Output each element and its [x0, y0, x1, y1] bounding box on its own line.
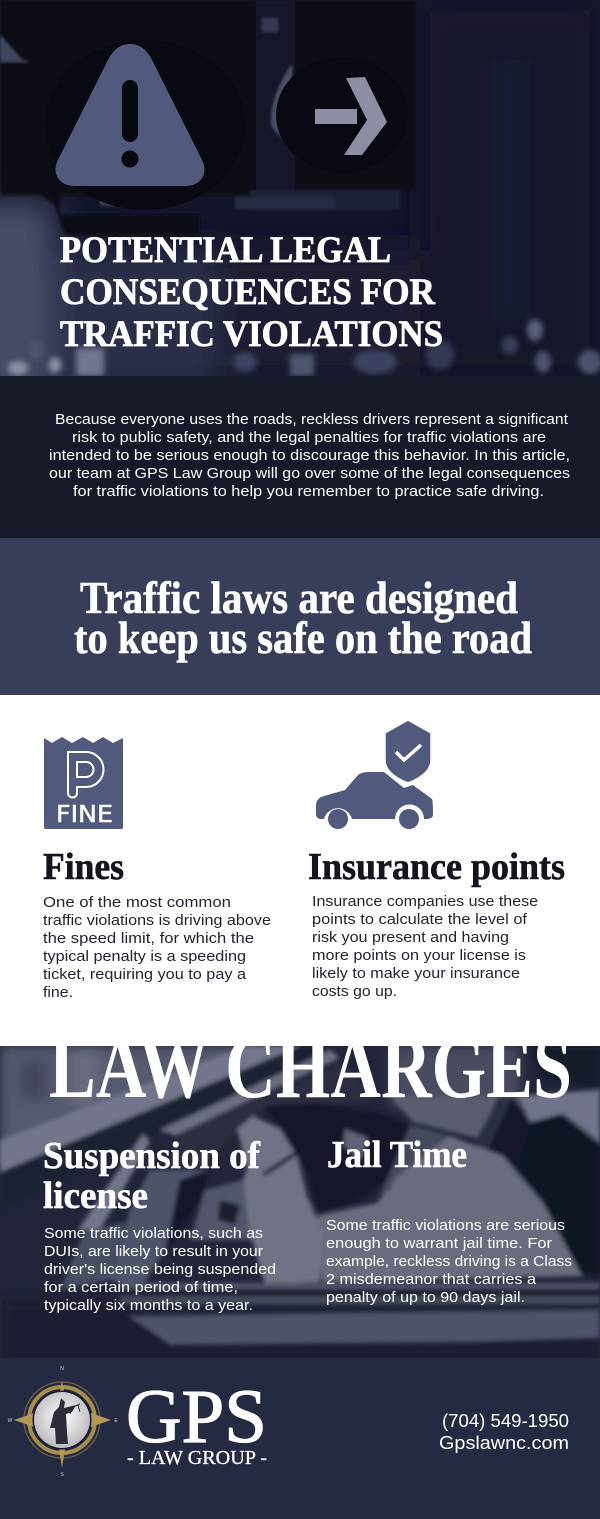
- heading: traffic laws: to keep us safe on the road: [74, 613, 532, 663]
- intro paragraph: our team at GPS Law Group will go over some of the legal consequences: [49, 465, 570, 482]
- text: fines body: the speed limit, for which the: [43, 930, 254, 947]
- text: suspension body: [44, 1225, 276, 1314]
- car roof and window pillars: [0, 1046, 300, 1178]
- icon: warning triangle: [56, 44, 204, 186]
- text: jail time body: Some traffic violations are serious: [326, 1217, 565, 1234]
- heading: fines: Fines: [43, 846, 124, 888]
- text: jail time body: penalty of up to 90 days jail.: [326, 1289, 525, 1306]
- title: CONSEQUENCES FOR: [60, 272, 436, 313]
- traffic signal housing: [0, 0, 415, 235]
- panel: footer: [0, 1358, 600, 1519]
- text: insurance body: more points on your license is: [312, 947, 526, 964]
- logo wordmark: GPS: [126, 1375, 267, 1459]
- icon: compass logo: [8, 1366, 118, 1478]
- panel: fines and insurance points: [0, 695, 600, 1046]
- icon: car with shield: [316, 720, 433, 829]
- text: jail time body: enough to warrant jail time. For: [326, 1235, 552, 1252]
- panel: law charges photo background: [0, 1046, 600, 1370]
- text: suspension body: for a certain period of time,: [44, 1279, 238, 1296]
- text: suspension body: driver's license being suspended: [44, 1261, 276, 1278]
- heading: suspension of license: [43, 1135, 261, 1217]
- text: fines body: typical penalty is a speeding: [43, 948, 246, 965]
- heading: suspension of license: license: [43, 1175, 148, 1217]
- heading: jail time: Jail Time: [327, 1134, 467, 1176]
- intro paragraph: for traffic violations to help you remember to practice safe driving.: [73, 483, 544, 500]
- title: TRAFFIC VIOLATIONS: [60, 314, 443, 355]
- text: insurance body: costs go up.: [312, 983, 397, 1000]
- heading: traffic laws: Traffic laws are designed: [80, 573, 518, 623]
- window sill: [120, 1283, 600, 1289]
- contact details: (704) 549-1950: [442, 1411, 569, 1431]
- text: insurance body: Insurance companies use these: [312, 893, 538, 910]
- hair and beard: [263, 1103, 410, 1213]
- intro paragraph: Because everyone uses the roads, reckless drivers represent a significant: [55, 411, 569, 428]
- text: jail time body: [326, 1217, 572, 1306]
- man's shirt: [317, 1126, 582, 1282]
- text: fines body: ticket, requiring you to pay a: [43, 966, 247, 983]
- text: suspension body: Some traffic violations, such as: [44, 1225, 263, 1242]
- text: insurance body: points to calculate the level of: [312, 911, 528, 928]
- text: insurance body: likely to make your insurance: [312, 965, 520, 982]
- intro paragraph: intended to be serious enough to discourage this behavior. In this article,: [49, 447, 570, 464]
- text: suspension body: typically six months to a year.: [44, 1297, 253, 1314]
- icon: compass logo: E: [114, 1418, 118, 1424]
- panel: intro: [0, 376, 600, 538]
- hero panel: traffic signal photo background: [0, 0, 600, 400]
- icon: compass logo: W: [8, 1418, 13, 1424]
- text: jail time body: 2 misdemeanor that carries a: [326, 1271, 537, 1288]
- panel: section heading band: [0, 538, 600, 695]
- text: fines body: fine.: [43, 984, 73, 1001]
- text: fines body: One of the most common: [43, 894, 231, 911]
- sleeve and hand: [237, 1116, 323, 1284]
- logo wordmark: - LAW GROUP -: [127, 1447, 267, 1469]
- text: suspension body: DUIs, are likely to result in your: [44, 1243, 263, 1260]
- text: insurance body: [312, 893, 538, 1000]
- icon: parking fine ticket: FINE: [56, 802, 113, 828]
- text: fines body: traffic violations is driving above: [43, 912, 271, 929]
- door frame and right seat: [390, 1096, 500, 1138]
- contact details: Gpslawnc.com: [439, 1433, 569, 1453]
- text: insurance body: risk you present and having: [312, 929, 509, 946]
- icon: compass logo: N: [60, 1366, 64, 1372]
- title: POTENTIAL LEGAL: [60, 230, 391, 271]
- intro paragraph: [49, 411, 570, 500]
- heading: suspension of license: Suspension of: [43, 1135, 261, 1177]
- contact details: [439, 1411, 569, 1453]
- icon: compass logo: S: [60, 1472, 64, 1478]
- icon: parking fine ticket: [44, 737, 123, 829]
- heading: traffic laws: [74, 573, 532, 663]
- text: fines body: [43, 894, 271, 1001]
- icon: arrow on traffic signal: [315, 77, 387, 155]
- text: jail time body: example, reckless driving is a Class: [326, 1253, 572, 1270]
- intro paragraph: risk to public safety, and the legal penalties for traffic violations are: [72, 429, 546, 446]
- heading: insurance points: Insurance points: [308, 846, 565, 888]
- title: [60, 230, 443, 355]
